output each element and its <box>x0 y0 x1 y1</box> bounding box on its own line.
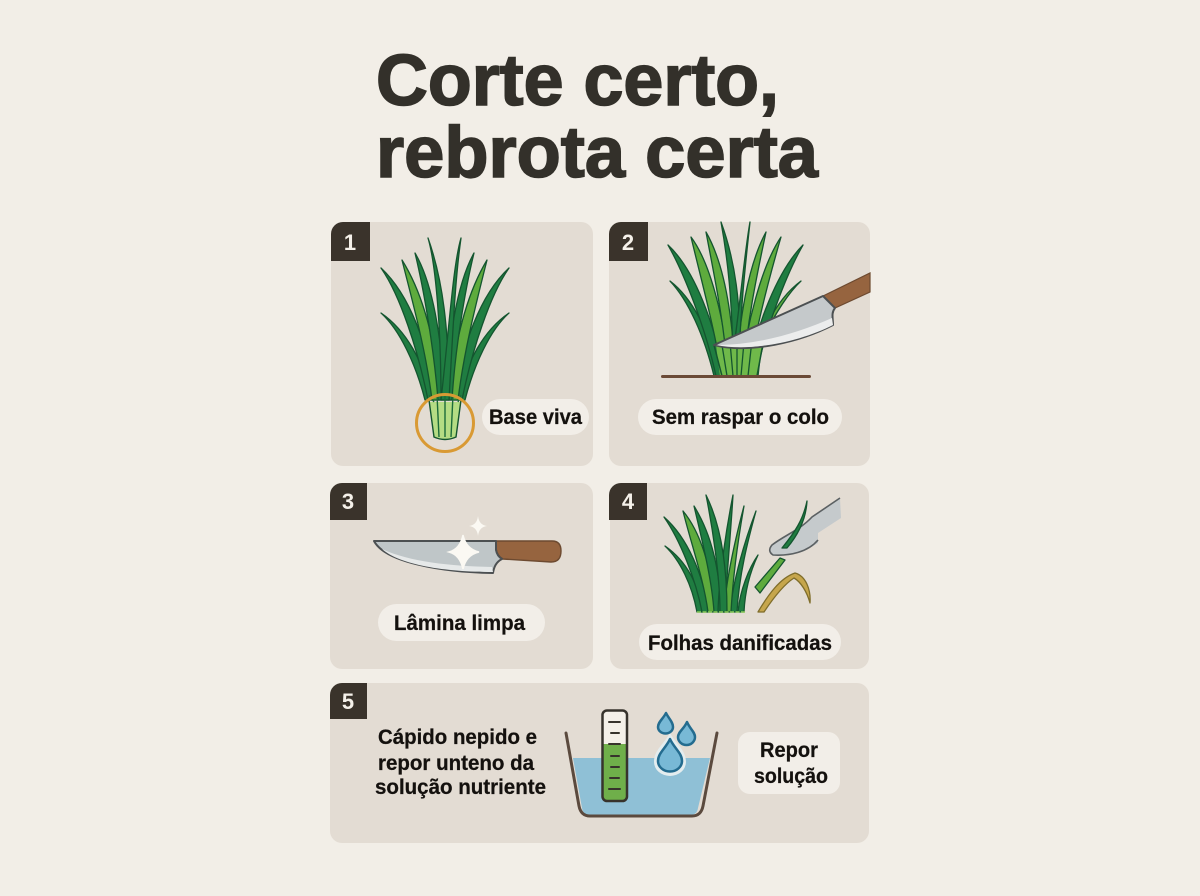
text block <box>375 726 546 799</box>
text block: Cápido nepido e <box>378 726 537 749</box>
icon: dry leaf <box>758 573 810 612</box>
icon: basin with water and gauge <box>566 710 717 816</box>
badge 5 <box>330 683 367 719</box>
icon: gray tweezers <box>769 498 841 555</box>
panel 5: repor solução <box>330 683 869 843</box>
label: repor solução <box>738 732 840 794</box>
icon: plant with live base <box>381 238 509 452</box>
badge 5: 5 <box>342 689 354 714</box>
panel 1: base viva <box>331 222 593 466</box>
icon: plant and removed leaves <box>664 495 841 612</box>
badge 2 <box>609 222 648 261</box>
panel 2: sem raspar o colo <box>609 222 870 466</box>
label: repor solução: Repor <box>760 739 818 762</box>
text block: solução nutriente <box>375 776 546 799</box>
title <box>376 41 819 193</box>
icon: broken leaf <box>755 501 807 593</box>
title: rebrota certa <box>376 113 819 193</box>
icon: water drops <box>654 713 695 776</box>
label: repor solução: solução <box>754 765 828 788</box>
icon: clean knife with sparkles <box>374 516 561 573</box>
title: Corte certo, <box>376 41 779 121</box>
text block: repor unteno da <box>378 752 534 775</box>
label: base viva: Base viva <box>489 406 582 429</box>
label: lâmina limpa <box>378 604 545 641</box>
badge 1 <box>331 222 370 261</box>
label: folhas danificadas <box>639 624 841 660</box>
badge 1: 1 <box>344 230 356 255</box>
panel 3: lâmina limpa <box>330 483 593 669</box>
label: folhas danificadas: Folhas danificadas <box>648 632 832 655</box>
icon: gauge <box>602 710 627 801</box>
badge 4 <box>609 483 647 520</box>
label: lâmina limpa: Lâmina limpa <box>394 612 525 635</box>
label: sem raspar o colo: Sem raspar o colo <box>652 406 829 429</box>
label: base viva <box>482 399 589 435</box>
label: sem raspar o colo <box>638 399 842 435</box>
icon: plant being cut <box>661 222 870 378</box>
icon: knife <box>714 273 870 348</box>
badge 4: 4 <box>622 489 635 514</box>
badge 2: 2 <box>622 230 634 255</box>
panel 4: folhas danificadas <box>609 483 869 669</box>
badge 3 <box>330 483 367 520</box>
badge 3: 3 <box>342 489 354 514</box>
